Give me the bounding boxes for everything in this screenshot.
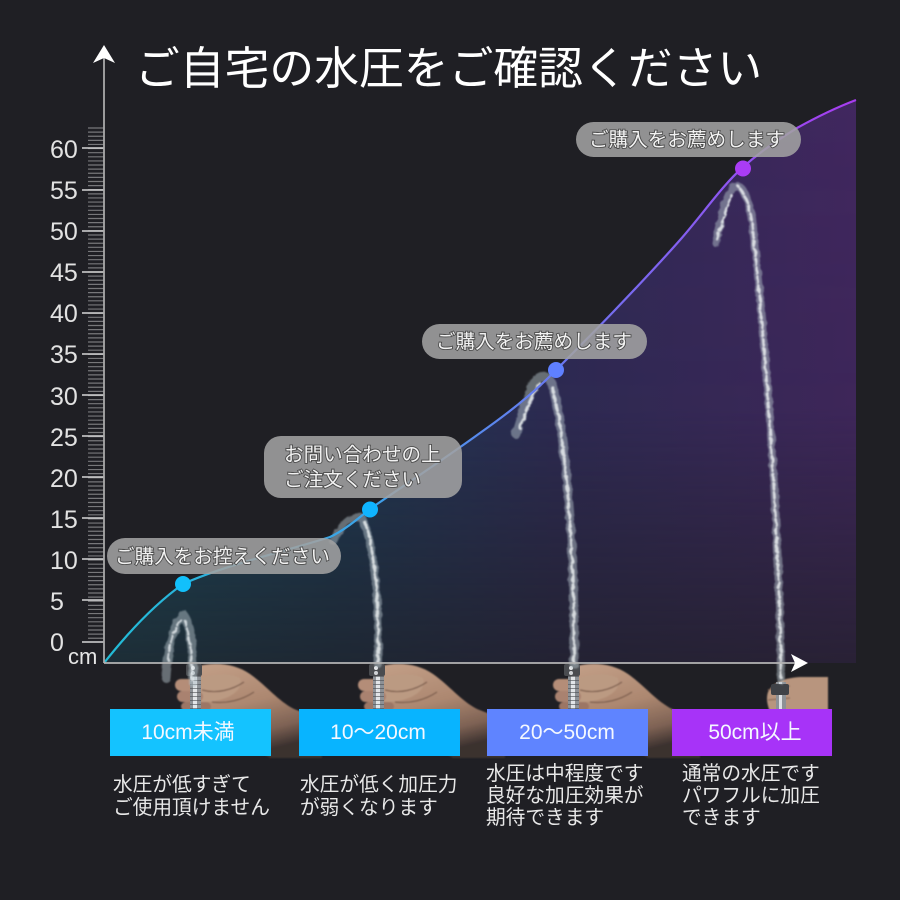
y axis labels: 30 — [50, 383, 78, 411]
gradient area under curve — [104, 100, 856, 663]
description 3: 水圧は中程度です — [486, 763, 644, 785]
y axis labels: 60 — [50, 136, 78, 164]
range box: 20~50cm: 20〜50cm — [519, 721, 615, 744]
description 1: 水圧が低すぎて — [113, 774, 251, 796]
y axis labels: 35 — [50, 341, 78, 369]
title: ご自宅の水圧をご確認ください — [135, 44, 762, 94]
hand 1 — [175, 664, 322, 758]
description 1: ご使用頂けません — [113, 797, 270, 819]
y axis labels: 0 — [50, 629, 64, 657]
range box: 10cm未満 — [110, 709, 271, 756]
range box: 20~50cm — [487, 709, 648, 756]
callout: 10-20cm: お問い合わせの上 — [284, 444, 441, 466]
description 4: パワフルに加圧 — [682, 785, 820, 807]
description 4: できます — [682, 807, 761, 829]
hose 1 — [186, 664, 202, 710]
description 2: 水圧が低く加圧力 — [300, 774, 458, 796]
callout: 20-50cm — [422, 324, 647, 359]
water stream 3 — [516, 377, 574, 664]
range box: 10cm未満: 10cm未満 — [141, 721, 235, 744]
range box: 10~20cm: 10〜20cm — [330, 721, 426, 744]
hose 2 — [369, 664, 385, 710]
description 4 — [682, 763, 820, 829]
y axis labels: 45 — [50, 259, 78, 287]
y axis labels — [50, 136, 97, 669]
callout: 10cm — [107, 538, 341, 574]
description 3: 期待できます — [486, 807, 604, 829]
range box: 10~20cm — [299, 709, 460, 756]
hand 2 — [358, 664, 505, 758]
y axis labels: 50 — [50, 218, 78, 246]
hand 4 — [767, 677, 828, 712]
water stream 2 — [333, 517, 378, 664]
description 2 — [300, 774, 458, 819]
curve — [104, 100, 856, 663]
x axis — [104, 654, 808, 672]
callout: 50cm — [576, 122, 801, 157]
y axis labels: 15 — [50, 506, 78, 534]
water stream 1 — [166, 616, 193, 682]
callout: 10cm: ご購入をお控えください — [115, 546, 330, 568]
description 2: が弱くなります — [300, 797, 438, 819]
y axis labels: 10 — [50, 547, 78, 575]
range box: 50cm以上: 50cm以上 — [708, 721, 802, 744]
hand 3 — [553, 664, 700, 758]
callout: 10-20cm — [264, 436, 462, 498]
callout: 10-20cm: ご注文ください — [284, 469, 421, 491]
hose 3 — [564, 664, 580, 710]
y axis labels: cm — [68, 644, 97, 669]
callout: 20-50cm: ご購入をお薦めします — [436, 331, 632, 353]
description 3 — [486, 763, 644, 829]
description 1 — [113, 774, 270, 819]
water stream 4 — [716, 186, 781, 680]
y axis labels: 55 — [50, 177, 78, 205]
description 4: 通常の水圧です — [682, 763, 820, 785]
y axis labels: 40 — [50, 300, 78, 328]
y axis labels: 20 — [50, 465, 78, 493]
hose 4 — [771, 682, 789, 710]
y axis labels: 5 — [50, 588, 64, 616]
description 3: 良好な加圧効果が — [486, 785, 644, 807]
data point dots — [175, 160, 751, 592]
callout: 50cm: ご購入をお薦めします — [589, 129, 785, 151]
range box: 50cm以上 — [672, 709, 832, 756]
y axis with ticks — [82, 45, 115, 663]
y axis labels: 25 — [50, 424, 78, 452]
